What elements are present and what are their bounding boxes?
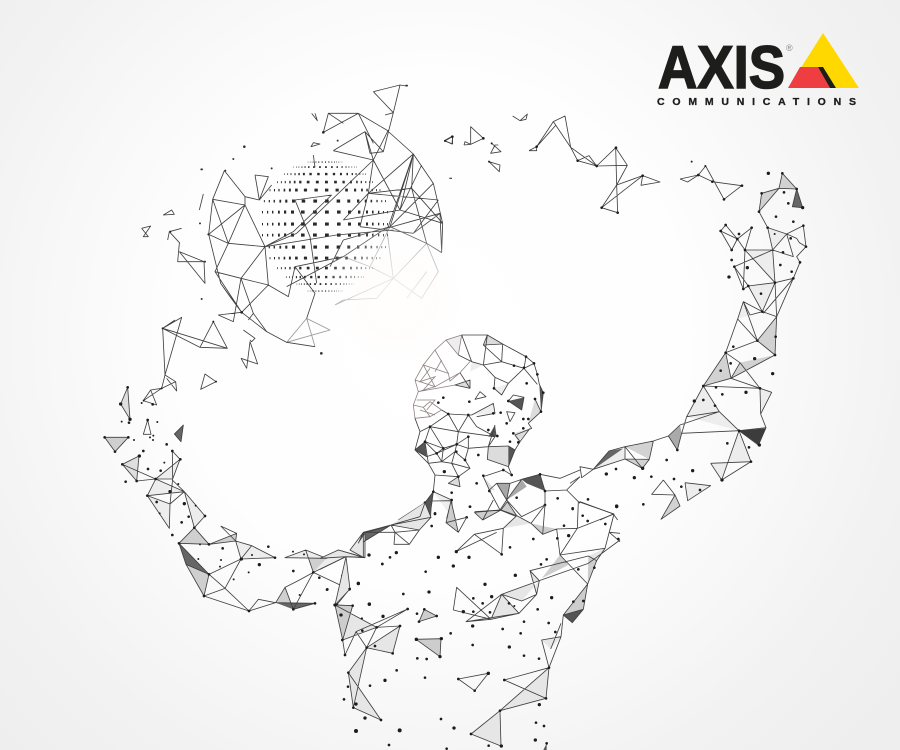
top fragments trailing to the right xyxy=(444,114,743,214)
sphere: dotted globe xyxy=(262,161,388,292)
central light glow xyxy=(318,220,478,380)
logo triangle: black stripe xyxy=(818,67,836,88)
logo triangle: red xyxy=(788,67,830,88)
right arm and hand xyxy=(570,172,807,520)
floating fragments under sphere xyxy=(141,317,227,406)
logo: Axis Communications xyxy=(657,33,859,108)
registered mark: ® xyxy=(786,43,793,53)
sphere: wireframe mesh xyxy=(142,85,453,368)
logo wordmark: AXIS xyxy=(658,34,785,101)
left arm xyxy=(103,386,390,630)
head xyxy=(398,335,580,520)
torso xyxy=(320,500,620,750)
logo tagline: COMMUNICATIONS xyxy=(657,96,856,108)
logo triangle: yellow xyxy=(788,33,859,88)
